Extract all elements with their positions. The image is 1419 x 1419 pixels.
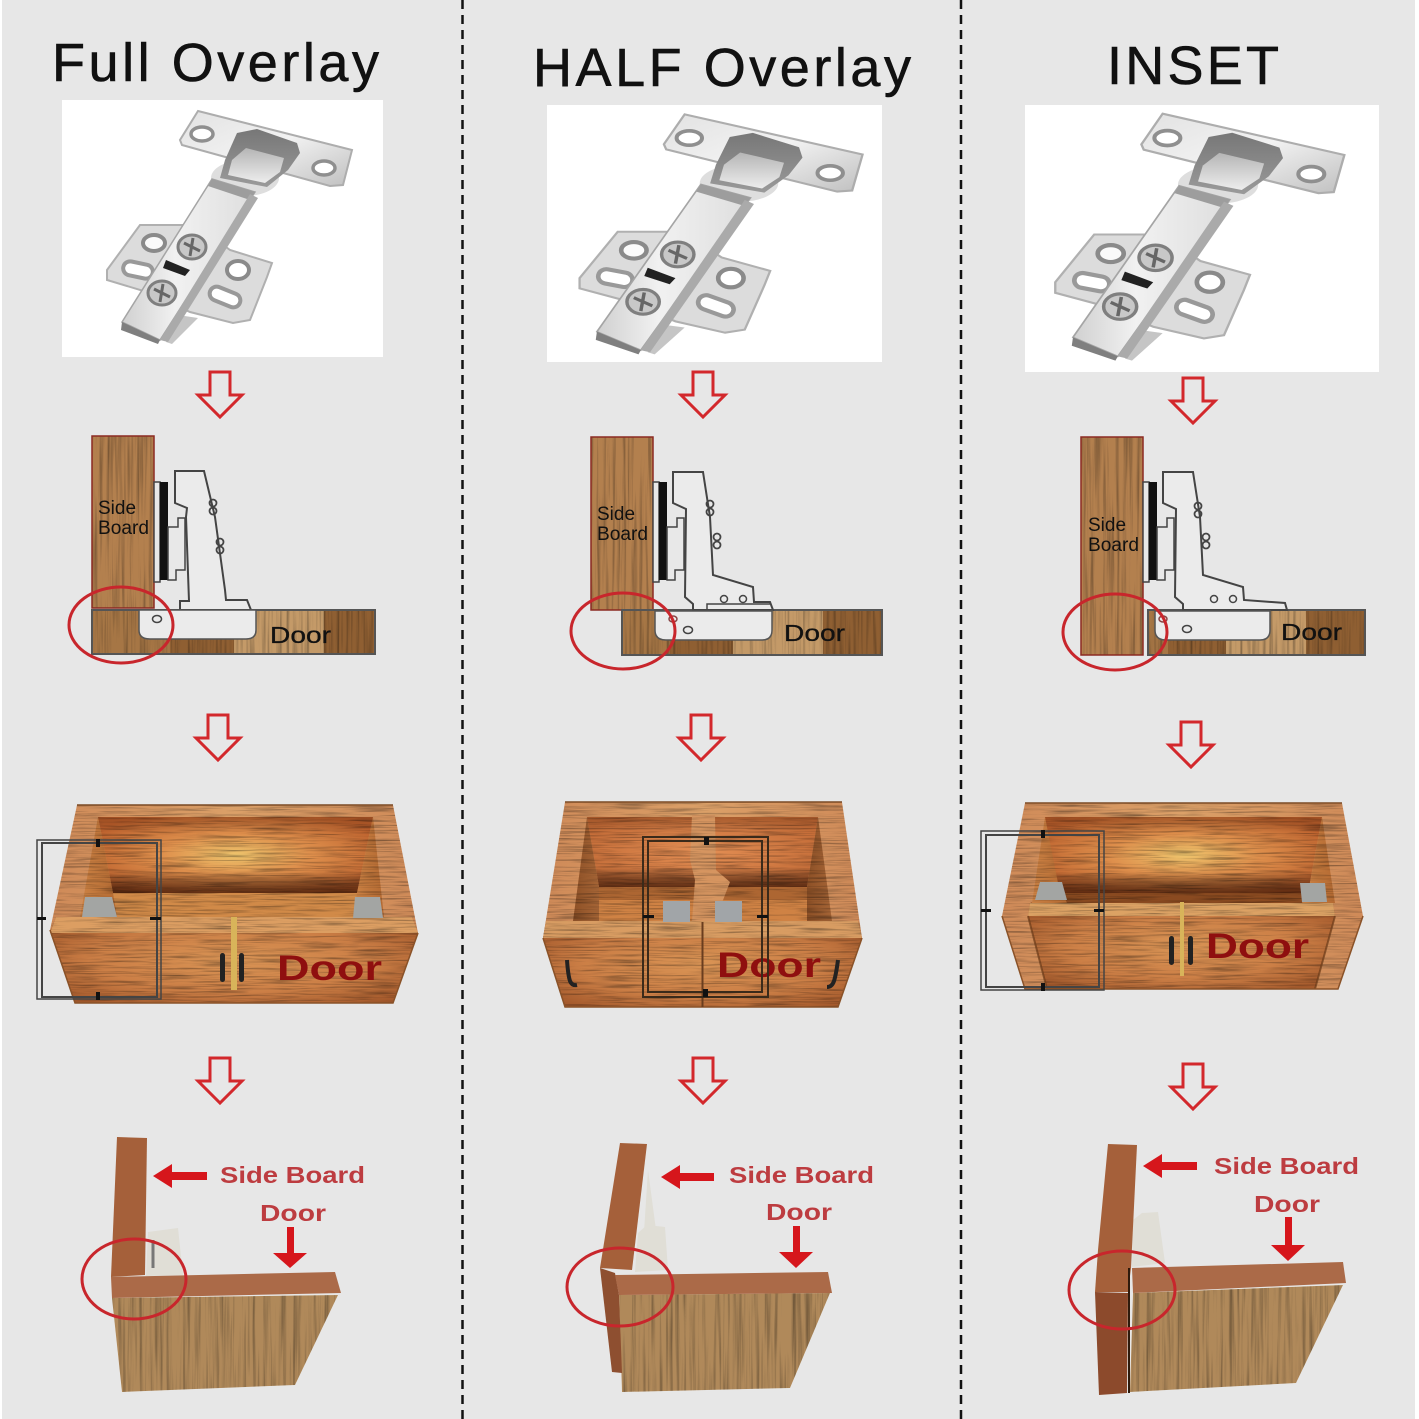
title: INSET: INSET (1107, 36, 1279, 96)
label: Door: Door (1254, 1191, 1320, 1217)
door outline (981, 831, 1104, 990)
arrow: down 3 (1171, 1064, 1215, 1109)
title: HALF Overlay: HALF Overlay (533, 38, 911, 98)
callout circle (69, 587, 173, 663)
hinge photo: full overlay (62, 100, 383, 357)
arrow: down 2 (1169, 722, 1213, 767)
arrow: Side Board pointer (1143, 1154, 1197, 1178)
corner photo (1069, 1144, 1359, 1395)
stopper blocks (663, 901, 690, 922)
diagram: side board and door section (69, 436, 375, 663)
callout circle (1063, 594, 1167, 670)
arrow: down 3 (198, 1058, 242, 1103)
column divider right (960, 0, 962, 1419)
arrow: Door pointer (273, 1227, 307, 1268)
label: Door: Door (1281, 619, 1342, 645)
hinge photo: half overlay (547, 105, 882, 362)
diagram: side board and door section: Board (1088, 535, 1139, 556)
label: Door: Door (277, 949, 382, 988)
label: Side Board: Side (1088, 515, 1126, 536)
column: INSET (981, 36, 1379, 1395)
label: Door: Door (784, 620, 845, 646)
handles (1169, 936, 1174, 965)
diagram: side board and door section (1063, 437, 1365, 670)
diagram: side board and door section: Board (597, 524, 648, 545)
callout circle (571, 593, 675, 669)
stopper blocks (1035, 882, 1067, 900)
label: Side Board: Side Board (220, 1162, 365, 1188)
cabinet illustration (37, 805, 418, 1003)
arrow: Side Board pointer (661, 1165, 714, 1189)
stopper blocks (82, 897, 117, 917)
callout circle (82, 1239, 186, 1319)
arrow: down 2 (679, 715, 723, 760)
column divider left (461, 0, 464, 1419)
diagram: side board and door section: Board (98, 518, 149, 539)
arrow: down 1 (198, 372, 242, 417)
callout circle (567, 1248, 673, 1326)
arrow: Side Board pointer (153, 1164, 207, 1188)
cabinet illustration (981, 803, 1363, 991)
label: Side Board: Side (597, 504, 635, 525)
label: Door: Door (1206, 927, 1309, 966)
label: Door: Door (260, 1200, 326, 1226)
hinge photo: inset (1025, 105, 1379, 372)
label: Side Board: Side Board (1214, 1153, 1359, 1179)
cabinet illustration (543, 802, 862, 1007)
callout circle (1069, 1251, 1175, 1329)
title: Full Overlay: Full Overlay (52, 33, 379, 93)
label: Door: Door (717, 946, 821, 985)
corner photo (82, 1137, 365, 1392)
label: Side Board: Side Board (729, 1162, 874, 1188)
corner photo (567, 1143, 874, 1392)
diagram: side board and door section (571, 437, 882, 669)
arrow: down 1 (1171, 378, 1215, 423)
arrow: Door pointer (1271, 1217, 1305, 1261)
label: Side Board: Side (98, 498, 136, 519)
door outline (37, 840, 161, 999)
arrow: Door pointer (779, 1226, 813, 1268)
handles (220, 953, 225, 982)
column: HALF Overlay (533, 38, 911, 1392)
arrow: down 3 (681, 1058, 725, 1103)
arrow: down 2 (196, 715, 240, 760)
label: Door: Door (766, 1199, 832, 1225)
handles (567, 960, 577, 985)
label: Door: Door (270, 622, 331, 648)
arrow: down 1 (681, 372, 725, 417)
door outlines (643, 837, 768, 997)
column: Full Overlay (37, 33, 418, 1392)
